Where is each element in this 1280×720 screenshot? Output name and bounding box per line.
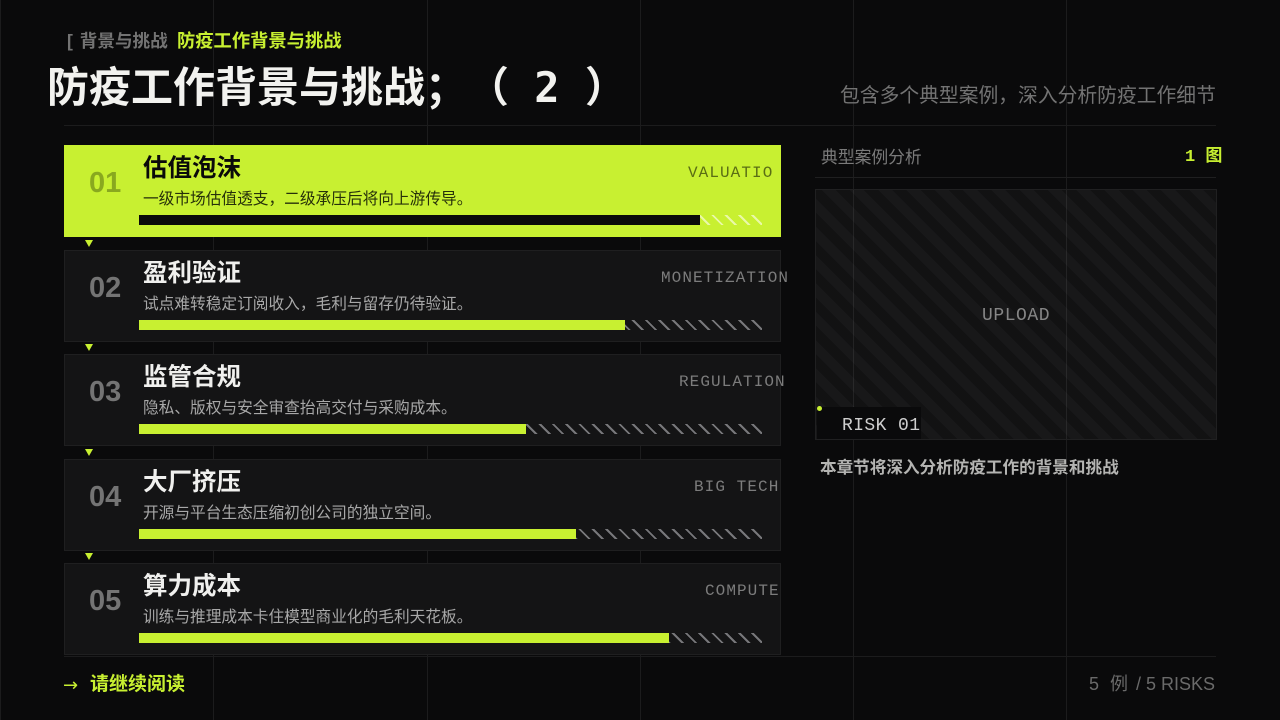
number 02: 02	[89, 272, 121, 304]
tag: VALUATIO	[688, 164, 773, 182]
heading: 大厂挤压	[143, 469, 241, 496]
arrow: down	[85, 240, 93, 247]
eyebrow topic: 防疫工作背景与挑战	[177, 30, 342, 51]
caption: 本章节将深入分析防疫工作的背景和挑战	[820, 458, 1119, 477]
panel: risk 02 monetization	[64, 250, 781, 342]
upload label: UPLOAD	[982, 306, 1050, 326]
heading: 监管合规	[143, 364, 241, 391]
arrow: down	[85, 344, 93, 351]
arrow: down	[85, 553, 93, 560]
progress bar 85%	[139, 633, 762, 643]
progress bar 78%	[139, 320, 762, 330]
tag: COMPUTE	[705, 582, 780, 600]
eyebrow bracket and category: [ 背景与挑战	[67, 31, 168, 51]
panel: risk 01 valuation	[64, 145, 781, 237]
progress bar 90%	[139, 215, 762, 225]
subtitle: 包含多个典型案例，深入分析防疫工作细节	[840, 85, 1216, 107]
count total: / 5 RISKS	[1136, 674, 1215, 694]
description: 试点难转稳定订阅收入，毛利与留存仍待验证。	[143, 296, 472, 313]
tag: REGULATION	[679, 373, 786, 391]
tag: BIG TECH	[694, 478, 779, 496]
progress bar 62%	[139, 424, 762, 434]
heading: 算力成本	[143, 573, 241, 600]
number 04: 04	[89, 481, 121, 513]
progress bar 70%	[139, 529, 762, 539]
case panel heading	[815, 145, 1216, 178]
number 03: 03	[89, 376, 121, 408]
case heading label: 典型案例分析	[821, 148, 922, 167]
case count: 1 图	[1185, 148, 1222, 167]
badge dot	[817, 406, 822, 411]
image placeholder	[815, 189, 1217, 440]
number 05: 05	[89, 585, 121, 617]
heading: 估值泡沫	[143, 155, 241, 182]
number 01: 01	[89, 167, 121, 199]
description: 开源与平台生态压缩初创公司的独立空间。	[143, 505, 441, 522]
heading: 盈利验证	[143, 260, 241, 287]
panel: risk 04 big tech	[64, 459, 781, 551]
icon: arrow: →	[63, 675, 78, 696]
title: 防疫工作背景与挑战；（ 2 ）	[47, 63, 627, 112]
arrow: down	[85, 449, 93, 456]
description: 隐私、版权与安全审查抬高交付与采购成本。	[143, 400, 457, 417]
count number: 5	[1089, 674, 1099, 694]
description: 一级市场估值透支，二级承压后将向上游传导。	[143, 191, 472, 208]
continue text: 请继续阅读	[90, 674, 185, 695]
tag: MONETIZATION	[661, 269, 789, 287]
footer: continue reading	[63, 674, 185, 696]
risk badge	[817, 407, 921, 439]
description: 训练与推理成本卡住模型商业化的毛利天花板。	[143, 609, 472, 626]
panel: risk 05 compute	[64, 563, 781, 655]
badge text: RISK 01	[842, 416, 920, 436]
count unit: 例	[1110, 674, 1128, 694]
footer: count	[1089, 674, 1215, 694]
panel: risk 03 regulation	[64, 354, 781, 446]
eyebrow: section label	[67, 30, 342, 51]
